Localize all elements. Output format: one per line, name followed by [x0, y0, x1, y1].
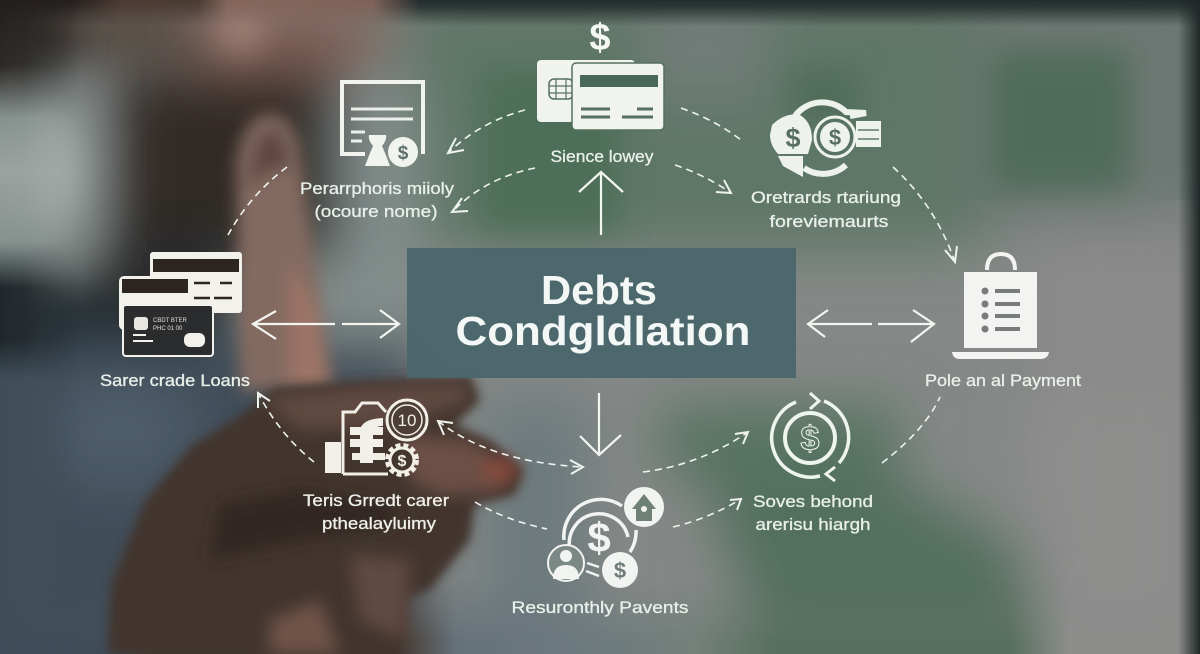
panel: central title box: [407, 248, 796, 378]
icon: dollar sign: $: [589, 17, 611, 59]
heading: Debts: Debts: [541, 267, 657, 313]
label: Perarrphoris miioly: [300, 179, 455, 221]
icon: coins, house and person: $: [614, 558, 626, 583]
label: Oretrards rtariung: foreviemaurts: [770, 212, 888, 231]
icon: cycle dollar: $: [801, 420, 820, 458]
label: Pole an al Payment: Pole an al Payment: [925, 371, 1081, 390]
icon: cycle dollar: [772, 393, 849, 481]
label: Sarer crade Loans: Sarer crade Loans: [100, 371, 250, 390]
icon: money bag and coin with note: $: [829, 125, 841, 150]
icon: document with bag and coin: $: [398, 143, 409, 164]
label: Oretrards rtariung: [751, 188, 901, 231]
icon: euro badge and gear: 10: [398, 411, 416, 430]
icon: three credit cards: PHC 01 00: [153, 326, 183, 332]
label: Soves behond: arerisu hiargh: [756, 515, 870, 534]
label: Teris Grredt carer: [303, 491, 449, 533]
icon: three credit cards: [119, 252, 242, 356]
dashed connectors: [228, 108, 957, 529]
icon: document with bag and coin: [340, 82, 423, 167]
icon: money bag and coin with note: $: [785, 123, 801, 153]
label: Resuronthly Pavents: Resuronthly Pavents: [512, 598, 688, 617]
arrow: left double: [253, 310, 399, 339]
icon: money bag and coin with note: [770, 102, 881, 177]
label: Perarrphoris miioly: (ocoure nome): [314, 202, 438, 221]
label: Sience lowey: Sience lowey: [550, 147, 654, 166]
icon: credit cards top: [537, 60, 664, 130]
arrow: down: [580, 393, 621, 455]
arrow: right double: [808, 310, 934, 342]
label: Soves behond: Soves behond: [753, 492, 873, 511]
icon: three credit cards: CBDT BTER: [153, 318, 188, 324]
label: Teris Grredt carer: Teris Grredt carer: [303, 491, 449, 510]
icon: coins, house and person: [548, 487, 664, 588]
label: Teris Grredt carer: pthealayluimy: [322, 514, 437, 533]
heading: Condgldlation: Condgldlation: [456, 308, 750, 354]
arrow: up: [579, 172, 623, 235]
icon: coins, house and person: $: [587, 514, 611, 561]
icon: euro badge and gear: $: [398, 453, 407, 470]
label: Perarrphoris miioly: Perarrphoris miioly: [300, 179, 455, 198]
label: Oretrards rtariung: Oretrards rtariung: [751, 188, 901, 207]
label: Soves behond: [753, 492, 873, 534]
icon: shopping bag checklist: [952, 254, 1049, 359]
icon: euro badge and gear: [325, 400, 427, 475]
